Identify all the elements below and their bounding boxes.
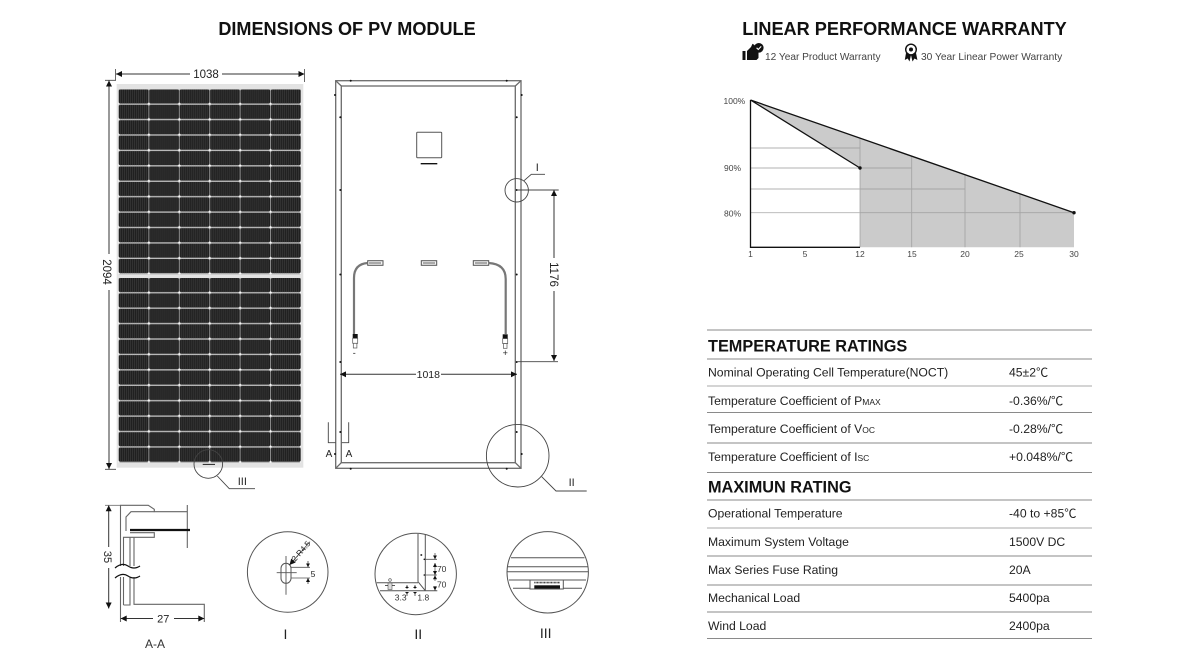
title: dimensions of PV module: DIMENSIONS OF PV MODULE [218, 19, 476, 39]
detail marker I [505, 162, 545, 202]
product warranty legend [742, 43, 881, 63]
x axis labels [748, 249, 1079, 259]
row: Voc: Temperature Coefficient of VOC [708, 422, 875, 436]
row: operational temperature: -40 to +85℃ [1009, 506, 1076, 520]
junction boxes [368, 261, 489, 265]
table: temperature ratings [707, 330, 1092, 472]
linear power warranty legend: 30 Year Linear Power Warranty [921, 52, 1063, 63]
row: system voltage: 1500V DC [1009, 535, 1065, 549]
positive cable and connector [489, 263, 508, 358]
height dimension 2094 [100, 80, 116, 469]
label III: III [540, 625, 552, 641]
back view of PV module [326, 80, 587, 491]
label I: I [284, 626, 287, 642]
mounting hole spacing 1176 [517, 190, 559, 362]
row: wind load [708, 619, 1050, 633]
grid lines [750, 138, 1074, 247]
axes [750, 100, 860, 247]
label square [417, 132, 442, 164]
table: maximum rating [707, 478, 1092, 638]
width dimension 1038 [116, 69, 304, 82]
row: mechanical load: 5400pa [1009, 591, 1050, 605]
glass layer [130, 529, 190, 531]
detail marker III [194, 450, 255, 489]
frame profile [120, 505, 204, 622]
y axis labels: 100% [724, 96, 746, 106]
detail II: 3.3 [395, 592, 407, 602]
detail I [247, 532, 328, 642]
row: mechanical load: Mechanical Load [708, 591, 800, 605]
row: fuse rating [708, 563, 1032, 577]
row: wind load: 2400pa [1009, 619, 1050, 633]
panel frame [117, 84, 303, 468]
heading: TEMPERATURE RATINGS [708, 338, 907, 356]
detail II: 70 [437, 564, 447, 574]
negative cable and connector [353, 263, 368, 358]
row: wind load: Wind Load [708, 619, 766, 633]
row: Isc: Temperature Coefficient of ISC [708, 450, 869, 464]
height dimension 35 [101, 505, 120, 608]
line chart: linear performance warranty [724, 96, 1079, 259]
product warranty legend: 12 Year Product Warranty [765, 52, 881, 63]
mounting hole width 1018: 1018 [417, 369, 440, 381]
section A-A drawing [101, 505, 204, 651]
height dimension 35: 35 [101, 551, 113, 563]
back frame outline [336, 81, 521, 468]
table rules [707, 330, 1092, 472]
break wave marks [115, 564, 141, 578]
detail I: 2-R4.5 [290, 539, 313, 563]
heading: MAXIMUN RATING [708, 478, 852, 496]
section marker A-A: A [346, 449, 353, 460]
x axis labels: 25 [1014, 249, 1024, 259]
width dimension 27 [121, 614, 204, 626]
row: NOCT: Nominal Operating Cell Temperature(NOCT) [708, 366, 948, 380]
detail marker I: I [536, 162, 539, 174]
label II: II [414, 626, 422, 642]
shaded warranty area [750, 100, 1074, 247]
solar cells upper half [118, 89, 301, 274]
width dimension 1038: 1038 [193, 69, 219, 81]
warranty lines [750, 100, 1074, 213]
detail II: 1.8 [417, 592, 429, 602]
end points [858, 166, 862, 170]
detail I: 5 [311, 569, 316, 579]
row: Pmax [708, 394, 1063, 408]
row: Voc: -0.28%/℃ [1009, 422, 1063, 436]
row: fuse rating: 20A [1009, 563, 1032, 577]
negative cable and connector: - [353, 348, 356, 358]
linear power warranty legend [905, 44, 1063, 63]
row: Isc: +0.048%/℃ [1009, 450, 1073, 464]
detail marker II [486, 424, 587, 491]
x axis labels: 12 [855, 249, 865, 259]
table rules [707, 500, 1092, 638]
detail II [375, 533, 456, 642]
mounting hole spacing 1176: 1176 [547, 262, 559, 287]
detail II: 70 [437, 580, 447, 590]
row: Voc [708, 422, 1063, 436]
section marker A-A [326, 422, 353, 460]
icon: ribbon award [905, 44, 917, 62]
row: system voltage [708, 535, 1065, 549]
x axis labels: 5 [803, 249, 808, 259]
detail marker II: II [569, 477, 575, 489]
detail marker III: III [238, 476, 247, 488]
y axis labels [724, 96, 746, 218]
row: Pmax: Temperature Coefficient of PMAX [708, 394, 881, 408]
x axis labels: 20 [960, 249, 970, 259]
section marker A-A: A [326, 449, 333, 460]
row: mechanical load [708, 591, 1050, 605]
solar cells lower half [118, 278, 301, 463]
y axis labels: 80% [724, 208, 741, 218]
row: Isc [708, 450, 1073, 464]
x axis labels: 1 [748, 249, 753, 259]
row: Pmax: -0.36%/℃ [1009, 394, 1063, 408]
x axis labels: 30 [1069, 249, 1079, 259]
y axis labels: 90% [724, 163, 741, 173]
row: fuse rating: Max Series Fuse Rating [708, 563, 838, 577]
width dimension 27: 27 [157, 614, 169, 626]
front view of PV module [100, 69, 304, 489]
height dimension 2094: 2094 [100, 259, 112, 285]
label A-A: A-A [145, 637, 165, 651]
row: NOCT: 45±2℃ [1009, 366, 1048, 380]
title: linear performance warranty: LINEAR PERFORMANCE WARRANTY [742, 19, 1067, 39]
x axis labels: 15 [907, 249, 917, 259]
icon: thumbs up with check [742, 43, 764, 60]
positive cable and connector: + [503, 348, 508, 358]
row: system voltage: Maximum System Voltage [708, 535, 849, 549]
detail III [507, 532, 588, 641]
mounting holes [334, 80, 523, 470]
row: operational temperature [708, 506, 1076, 520]
row: operational temperature: Operational Temperature [708, 506, 843, 520]
